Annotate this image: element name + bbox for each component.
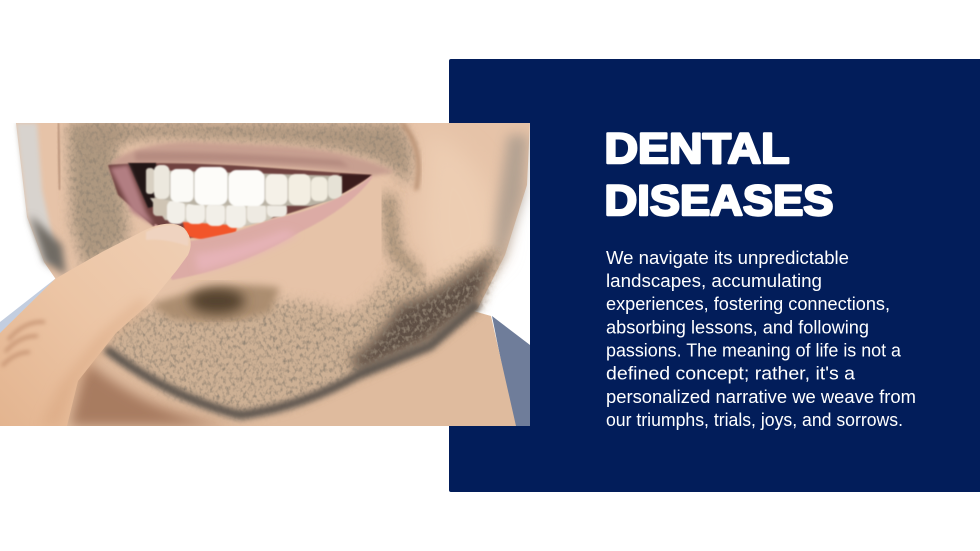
shirt left (0, 278, 56, 333)
panel: navy background (449, 59, 980, 492)
photo: man showing inflamed gums (0, 123, 530, 430)
mouth inner (108, 163, 372, 238)
right edge stubble (490, 135, 528, 280)
sideburn to beard right (388, 195, 420, 280)
body text: defined concept; rather, it's a (606, 364, 856, 384)
goatee area (150, 285, 280, 322)
title: DISEASES (604, 177, 834, 225)
body text: our triumphs, trials, joys, and sorrows. (606, 410, 903, 430)
side hair left (16, 123, 58, 262)
body text: We navigate its unpredictable (606, 248, 849, 268)
body text: passions. The meaning of life is not a (606, 340, 902, 360)
upper teeth (146, 165, 342, 206)
shirt right (492, 316, 530, 426)
lower lip (150, 175, 372, 280)
title (604, 125, 834, 225)
neck (60, 310, 516, 426)
jaw edge stubble (105, 304, 478, 415)
face skin (16, 123, 530, 341)
body text: personalized narrative we weave from (606, 387, 916, 407)
body text: absorbing lessons, and following (606, 318, 869, 338)
right cheek crease (402, 123, 419, 190)
body text: experiences, fostering connections, (606, 294, 890, 314)
body text (606, 248, 916, 430)
beard dark jaw band (350, 252, 495, 372)
finger (0, 224, 191, 430)
title: DENTAL (604, 125, 790, 173)
body text: landscapes, accumulating (606, 271, 822, 291)
chin beard mid-tone (110, 250, 500, 417)
moustache stubble (75, 123, 412, 185)
lower teeth (150, 197, 290, 228)
red gum (182, 221, 238, 240)
cheek stubble left (68, 123, 128, 268)
upper lip (108, 142, 395, 176)
